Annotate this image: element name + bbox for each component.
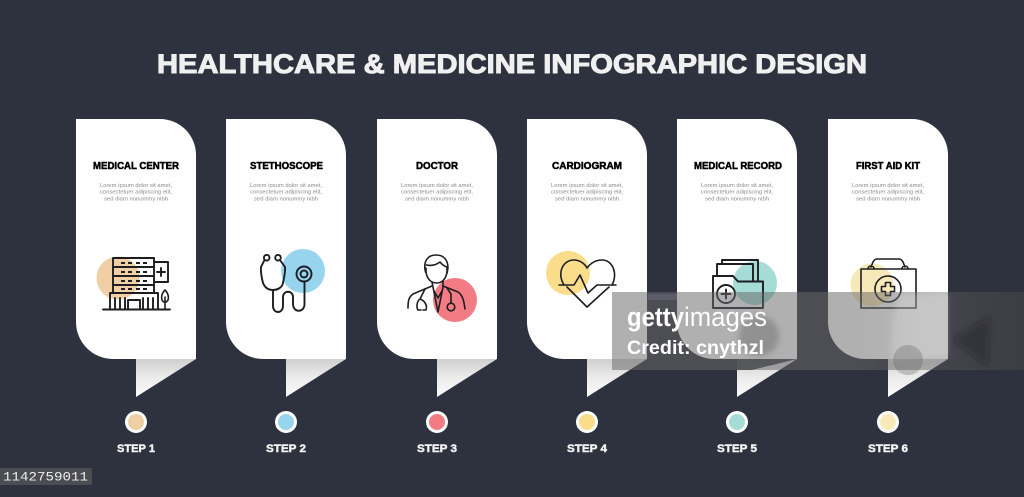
text block: consectetuer adipiscing elit, (701, 190, 773, 196)
icon: doctor (408, 255, 477, 322)
text block: Lorem ipsum dolor sit amet, (852, 183, 924, 189)
step 5 marker: STEP 5 (717, 443, 757, 455)
heading: STETHOSCOPE (250, 160, 323, 172)
text block: consectetuer adipiscing elit, (401, 190, 473, 196)
icon: stethoscope (261, 249, 325, 312)
text block: consectetuer adipiscing elit, (852, 190, 924, 196)
step 2 marker: STEP 2 (266, 443, 306, 455)
panel: medical record (677, 119, 797, 397)
card body (377, 119, 497, 359)
card body (527, 119, 647, 359)
text block: sed diam nonummy nibh (705, 196, 769, 202)
card body (677, 119, 797, 359)
heading: DOCTOR (416, 160, 458, 172)
image id tag: 1142759011 (3, 470, 88, 484)
text block (250, 183, 322, 202)
text block: consectetuer adipiscing elit, (250, 190, 322, 196)
step 6 marker: STEP 6 (868, 443, 908, 455)
panel: medical center (76, 119, 196, 397)
watermark overlay: images (684, 302, 767, 332)
text block: Lorem ipsum dolor sit amet, (701, 183, 773, 189)
card tail (437, 359, 497, 397)
icon: hospital building (96, 256, 170, 310)
card tail (286, 359, 346, 397)
watermark overlay (612, 292, 1024, 375)
panel: stethoscope (226, 119, 346, 397)
title: HEALTHCARE & MEDICINE INFOGRAPHIC DESIGN (157, 49, 867, 79)
icon: medical folder (713, 260, 777, 308)
text block: Lorem ipsum dolor sit amet, (551, 183, 623, 189)
step 3 marker (417, 411, 457, 455)
card tail (737, 359, 797, 397)
watermark credit: Credit: cnythzl (627, 338, 764, 359)
icon: first aid kit (850, 259, 916, 308)
card body (76, 119, 196, 359)
card body (226, 119, 346, 359)
step 4 marker: STEP 4 (567, 443, 608, 455)
text block: consectetuer adipiscing elit, (100, 190, 172, 196)
step 6 marker (868, 411, 908, 455)
text block: Lorem ipsum dolor sit amet, (250, 183, 322, 189)
card tail (888, 359, 948, 397)
text block: sed diam nonummy nibh (254, 196, 318, 202)
heading: FIRST AID KIT (856, 160, 921, 172)
text block: Lorem ipsum dolor sit amet, (100, 183, 172, 189)
watermark logo: getty (627, 302, 684, 332)
step 3 marker: STEP 3 (417, 443, 457, 455)
heading: CARDIOGRAM (552, 160, 622, 172)
step 5 marker (717, 411, 757, 455)
text block (852, 183, 924, 202)
text block (701, 183, 773, 202)
icon: heart with pulse (546, 251, 616, 307)
step 2 marker (266, 411, 306, 455)
panel: cardiogram (527, 119, 647, 397)
text block: sed diam nonummy nibh (856, 196, 920, 202)
step 1 marker (117, 411, 155, 455)
text block: Lorem ipsum dolor sit amet, (401, 183, 473, 189)
text block (551, 183, 623, 202)
card body (828, 119, 948, 359)
panel: doctor (377, 119, 497, 397)
text block: sed diam nonummy nibh (405, 196, 469, 202)
card tail (136, 359, 196, 397)
heading: MEDICAL RECORD (694, 160, 782, 172)
step 4 marker (567, 411, 608, 455)
text block (100, 183, 172, 202)
panel: first aid kit (828, 119, 948, 397)
text block: sed diam nonummy nibh (555, 196, 619, 202)
heading: MEDICAL CENTER (93, 160, 179, 172)
step 1 marker: STEP 1 (117, 443, 155, 455)
card tail (587, 359, 647, 397)
text block: sed diam nonummy nibh (104, 196, 168, 202)
text block (401, 183, 473, 202)
text block: consectetuer adipiscing elit, (551, 190, 623, 196)
